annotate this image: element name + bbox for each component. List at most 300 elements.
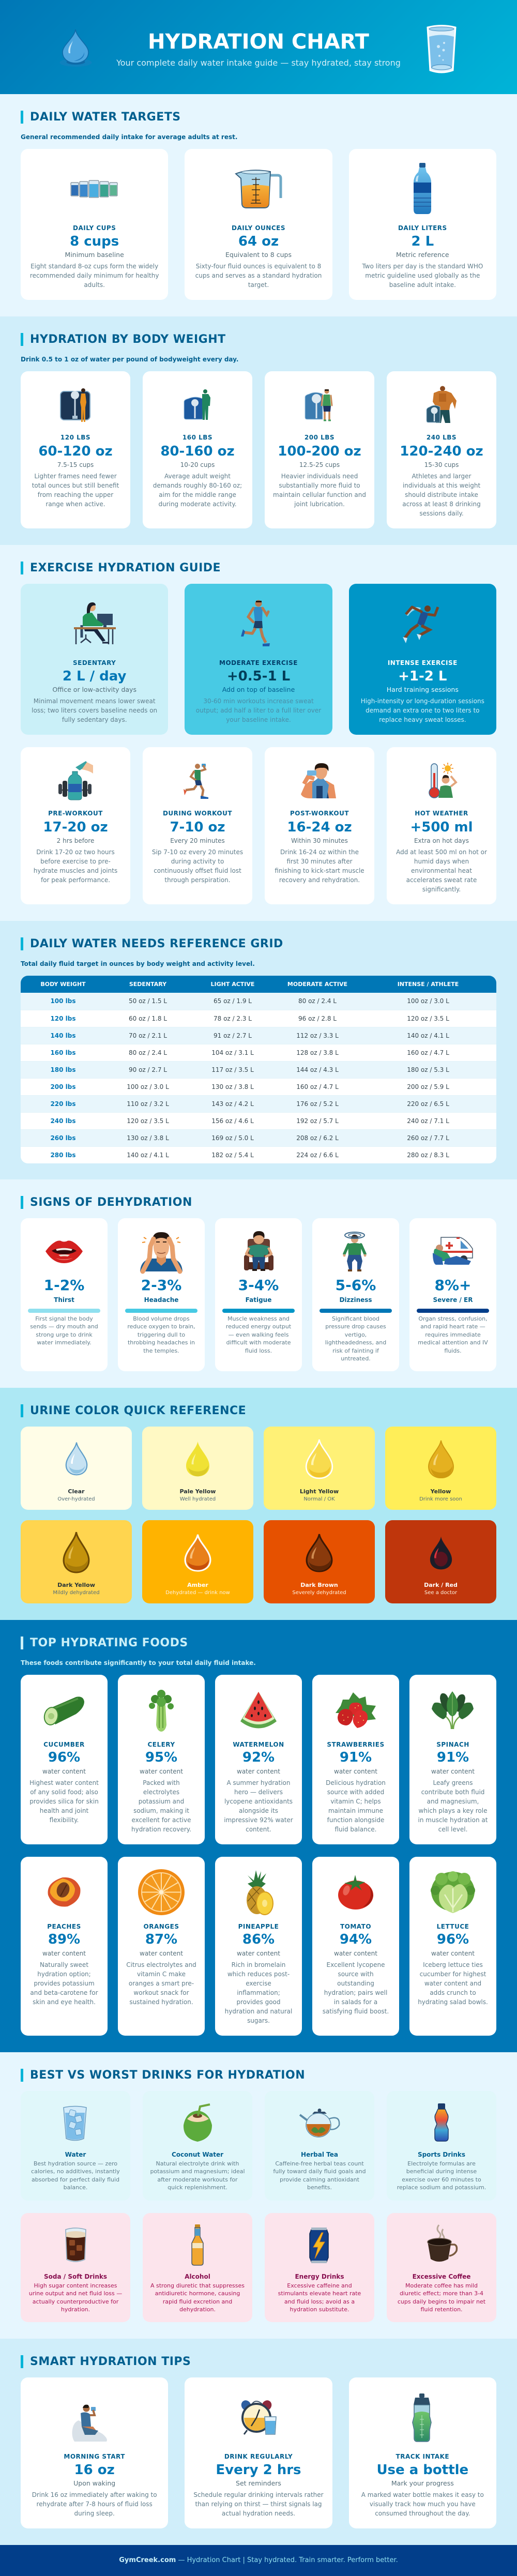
name: Coconut Water [172,2151,223,2158]
icon: beer bottle [191,2224,204,2266]
description: hydrating salad bowls. [418,1998,488,2006]
description: individuals at this weight [403,482,480,489]
card: post-workout [265,747,374,904]
description: joint lubrication. [294,501,345,508]
section: top hydrating foods [0,1620,517,2052]
label: STRAWBERRIES [327,1740,385,1748]
description [30,263,159,289]
description [349,2490,496,2518]
table: fluid targets by weight and activity: MODERATE ACTIVE [287,981,347,988]
description: Rich in bromelain [232,1961,285,1968]
icon: man drinking in bed [71,2405,109,2442]
description: recovery and rehydration. [279,876,360,884]
description: for peak performance. [41,876,110,884]
label: ORANGES [144,1922,179,1930]
table: fluid targets by weight and activity: 110 oz / 3.2 L [127,1100,169,1108]
note: 7.5-15 cups [57,461,94,468]
card: track intake [349,2377,496,2528]
card: 200 lbs [265,371,374,528]
table: fluid targets by weight and activity: 80 oz / 2.4 L [129,1049,167,1056]
description: pressure drop causes [325,1323,386,1330]
value: +500 ml [410,819,473,835]
meaning: Over-hydrated [57,1496,95,1502]
note: water content [237,1768,280,1775]
table: fluid targets by weight and activity: 100 oz / 3.0 L [407,997,449,1005]
heading: SIGNS OF DEHYDRATION [30,1196,192,1209]
note: water content [334,1950,377,1957]
description: contribute both fluid [421,1789,484,1796]
icon: glass teapot [299,2109,340,2138]
value: 2-3% [141,1277,181,1294]
description [409,1960,496,2007]
value: 96% [48,1750,80,1765]
name: Severe / ER [433,1296,473,1304]
description: maintain cellular function and [273,491,366,498]
value: 8 cups [70,234,119,249]
icon: tomato [338,1875,373,1910]
section: hydration by body weight [0,316,517,545]
card: clear [21,1427,132,1510]
name: Pale Yellow [180,1488,216,1495]
title: HYDRATION CHART [148,30,369,54]
description: workout snack for [133,1989,189,1996]
description: than relying on thirst — thirst signals lag [195,2501,322,2508]
section: urine color quick reference [0,1388,517,1620]
table: fluid targets by weight and activity: 143 oz / 4.2 L [211,1100,254,1108]
description: and rapid heart rate — [420,1323,485,1330]
card: soda [21,2213,130,2322]
icon: scale and slim woman [60,388,90,422]
description: before exercise to pre- [40,858,111,865]
label: SEDENTARY [73,659,116,666]
table: fluid targets by weight and activity: 160 oz / 4.7 L [407,1049,449,1056]
name: Fatigue [246,1296,271,1304]
card: daily ounces [185,149,332,300]
section: daily water needs reference grid [0,921,517,1179]
card: 160 lbs [143,371,252,528]
note: Mark your progress [391,2479,454,2487]
name: Water [65,2151,86,2158]
description: fully sedentary days. [62,716,127,723]
heading: DAILY WATER NEEDS REFERENCE GRID [30,937,283,950]
description: during sleep. [74,2510,115,2517]
note: water content [140,1768,183,1775]
table: fluid targets by weight and activity: 100 oz / 3.0 L [127,1083,169,1090]
card: water [21,2091,130,2201]
label: 240 LBS [427,434,457,441]
note: water content [237,1950,280,1957]
description: cups daily begins to impair net [398,2298,485,2305]
table: fluid targets by weight and activity: 70 oz / 2.1 L [129,1032,167,1039]
description [32,473,119,508]
value: 16-24 oz [287,819,352,835]
description: dehydration. [179,2306,216,2313]
icon: peach half [47,1877,81,1907]
label: SPINACH [436,1740,469,1748]
description [153,473,242,508]
icon: woman at desk [74,602,116,644]
card: watermelon [215,1675,302,1844]
description: medical attention and IV [418,1339,488,1346]
name: Dark Brown [300,1582,338,1588]
card: pineapple [215,1857,302,2036]
meaning: Severely dehydrated [292,1590,346,1596]
label: 120 LBS [60,434,90,441]
description: Caffeine-free herbal teas count [275,2160,364,2167]
card: oranges [118,1857,205,2036]
note: Metric reference [396,251,449,259]
section: exercise hydration guide [0,545,517,921]
description: the temples. [143,1347,179,1354]
description: and beta-carotene for [30,1989,98,1996]
table: fluid targets by weight and activity: 78 oz / 2.3 L [214,1014,252,1022]
description: hydration; pairs well [324,1989,387,1996]
description: from reaching the upper [38,491,113,498]
description: Moderate coffee has mild [405,2282,478,2289]
icon: orange slice [138,1869,185,1915]
description [21,1778,108,1825]
value: Every 2 hrs [216,2462,301,2478]
description [418,1315,488,1354]
name: Excessive Coffee [413,2273,470,2280]
table: fluid targets by weight and activity: 120 oz / 3.5 L [127,1117,169,1124]
note: Every 20 minutes [170,837,225,844]
description: Drink 17-20 oz two hours [36,848,115,856]
description: vertigo, [345,1331,367,1338]
description: electrolytes [143,1789,179,1796]
card: fatigue [215,1218,302,1371]
name: Yellow [431,1488,451,1495]
card: lettuce [409,1857,496,2036]
description [226,1315,291,1354]
description: continuously offset fluid lost [154,867,241,874]
description: throbbing headaches in [128,1339,195,1346]
meaning: See a doctor [424,1590,457,1596]
intro text: These foods contribute significantly to your total daily fluid intake. [21,1659,256,1666]
note: Upon waking [73,2479,115,2487]
table: fluid targets by weight and activity: 200 lbs [50,1083,76,1090]
description: excellent for active [131,1816,191,1824]
subtitle: Your complete daily water intake guide — stay hydrated, stay strong [116,58,401,68]
description: Minimal movement means lower sweat [34,698,156,705]
description [312,1960,399,2016]
description: quick replenishment. [168,2184,227,2191]
meaning: Well hydrated [180,1496,216,1502]
icon: five glasses [70,180,118,198]
description: health and joint [40,1807,88,1814]
description: exercise [246,1980,271,1987]
description: which reduces post- [227,1971,290,1978]
value: 87% [145,1932,177,1947]
name: Headache [144,1296,178,1304]
value: 5-6% [336,1277,376,1294]
description: 30-60 min workouts increase sweat [203,698,314,705]
name: Amber [187,1582,208,1588]
label: DAILY LITERS [398,224,447,232]
description: demands roughly 80-160 oz; [153,482,242,489]
name: Alcohol [185,2273,210,2280]
description: provides potassium [34,1980,95,1987]
description: satisfying fluid boost. [323,2008,389,2015]
icon: pineapple [247,1870,273,1915]
description: fluid balance. [335,1826,376,1833]
description: provides silica for skin [29,1798,99,1805]
icon: iced water glass [63,2105,87,2141]
table: fluid targets by weight and activity: 260 lbs [50,1134,76,1142]
icon: runner drinking [184,764,208,799]
card: tomato [312,1857,399,2036]
description: A summer hydration [226,1779,291,1786]
description: in salads for a [334,1998,377,2006]
description [127,1315,195,1354]
description: Best hydration source — zero [34,2160,117,2167]
label: LETTUCE [437,1922,469,1930]
table: fluid targets by weight and activity: 240 lbs [50,1117,76,1124]
card: daily liters [349,149,496,300]
icon: thermometer, sun and man [429,763,458,798]
description: Excellent lycopene [327,1961,385,1968]
name: Herbal Tea [301,2151,338,2158]
description [312,1778,399,1834]
table: fluid targets by weight and activity: 156 oz / 4.6 L [211,1117,254,1124]
card: thirst [21,1218,108,1371]
description: output; add half a liter to a full liter over [196,707,321,714]
label: CELERY [147,1740,175,1748]
value: 3-4% [238,1277,279,1294]
description: actually counterproductive for [33,2298,118,2305]
description: water immediately. [37,1339,92,1346]
note: Extra on hot days [414,837,469,844]
note: Within 30 minutes [291,837,348,844]
footer text: GymCreek.com — Hydration Chart | Stay hydrated. Train smarter. Perform better. [119,2556,398,2564]
table: fluid targets by weight and activity: 208 oz / 6.2 L [296,1134,339,1142]
heading: EXERCISE HYDRATION GUIDE [30,562,221,574]
intro text: General recommended daily intake for average adults at rest. [21,133,237,141]
value: 96% [437,1932,469,1947]
note: Office or low-activity days [52,686,136,693]
description [396,848,487,893]
table: fluid targets by weight and activity: 96 oz / 2.8 L [298,1014,337,1022]
icon: pale yellow drop [185,1441,210,1477]
description: lightheadedness, and [325,1339,386,1346]
description: Sip 7-10 oz every 20 minutes [152,848,243,856]
label: CUCUMBER [43,1740,85,1748]
icon: light yellow drop [305,1438,333,1479]
description: outstanding [337,1980,374,1987]
description: impressive 92% water [224,1816,293,1824]
description: Iceberg lettuce ties [423,1961,483,1968]
table: fluid targets by weight and activity: 120 oz / 3.5 L [407,1014,449,1022]
description: accelerates sweat rate [406,876,477,884]
table: fluid targets by weight and activity: 140 oz / 4.1 L [407,1032,449,1039]
description: which plays a key role [419,1807,487,1814]
description: of any solid food; also [30,1789,98,1796]
table: fluid targets by weight and activity: BODY WEIGHT [40,981,86,988]
icon: energy drink can [309,2226,329,2264]
table: fluid targets by weight and activity: 180 oz / 5.3 L [407,1066,449,1073]
table: fluid targets by weight and activity [21,976,496,1163]
table: fluid targets by weight and activity: 104 oz / 3.1 L [211,1049,254,1056]
icon: sprinting man [403,605,439,643]
card: dizziness [312,1218,399,1371]
card: sedentary [21,584,168,735]
description: source with [338,1971,374,1978]
description: first 30 minutes after [286,858,353,865]
heading: DAILY WATER TARGETS [30,111,181,124]
table: fluid targets by weight and activity: 220 lbs [50,1100,76,1108]
description: function alongside [327,1816,384,1824]
description: Average adult weight [164,473,231,480]
value: 86% [242,1932,275,1947]
table: fluid targets by weight and activity: 91 oz / 2.7 L [214,1032,252,1039]
value: 17-20 oz [43,819,108,835]
note: Equivalent to 8 cups [225,251,292,259]
description: strong urge to drink [36,1331,93,1338]
card: daily cups [21,149,168,300]
description: potassium and [139,1798,184,1805]
name: Thirst [54,1296,74,1304]
value: 8%+ [434,1277,472,1294]
table: fluid targets by weight and activity: 130 oz / 3.8 L [127,1134,169,1142]
icon: yellow drop [428,1439,454,1479]
value: 91% [437,1750,469,1765]
table: fluid targets by weight and activity: LIGHT ACTIVE [211,981,254,988]
table: fluid targets by weight and activity: 100 lbs [50,997,76,1005]
icon: dry lips [45,1240,83,1263]
value: 16 oz [74,2462,115,2478]
description: Packed with [143,1779,180,1786]
value: 1-2% [44,1277,84,1294]
description: Athletes and larger [412,473,471,480]
description [265,2160,374,2192]
icon: alarm clock and glass [240,2398,277,2435]
description: Natural electrolyte drink with [156,2160,239,2167]
description: lycopene antioxidants [224,1798,293,1805]
icon: glass of water [427,25,457,73]
table: fluid targets by weight and activity: 224 oz / 6.6 L [296,1151,339,1158]
description [273,473,366,508]
card: pre-workout [21,747,130,904]
meaning: Dehydrated — drink now [165,1590,230,1596]
table: fluid targets by weight and activity: 260 oz / 7.7 L [407,1134,449,1142]
card: 120 lbs [21,371,130,528]
table: fluid targets by weight and activity: 280 lbs [50,1151,76,1158]
icon: lettuce [431,1872,475,1913]
value: 80-160 oz [160,444,235,459]
name: Clear [68,1488,85,1495]
label: TOMATO [340,1922,371,1930]
description: sugars. [247,2017,270,2024]
description [143,2160,252,2192]
description: Heavier individuals need [281,473,358,480]
description: risk of fainting if [332,1347,379,1354]
description [196,698,322,723]
description: aim for the middle range [159,491,236,498]
description: through perspiration. [164,876,231,884]
description: benefits. [307,2184,332,2191]
description: your baseline intake. [226,716,291,723]
icon: marked water bottle [413,2393,432,2442]
description: fluids. [444,1347,462,1354]
description: water content and [424,1980,481,1987]
description [21,2160,130,2192]
description: environmental heat [411,867,472,874]
note: Hard training sessions [387,686,459,693]
description: hero — delivers [234,1789,283,1796]
description: requires immediate [425,1331,481,1338]
value: 89% [48,1932,80,1947]
card: morning start [21,2377,168,2528]
card: light yellow [264,1427,375,1510]
description: Delicious hydration [326,1779,386,1786]
value: +1-2 L [398,669,447,684]
table: fluid targets by weight and activity: 140 oz / 4.1 L [127,1151,169,1158]
label: INTENSE EXERCISE [388,659,458,666]
description: metric guideline used globally as the [365,272,480,279]
description: skin and eye health. [33,1998,96,2006]
card: dark red [385,1520,496,1603]
value: 100-200 oz [278,444,361,459]
card: moderate exercise [185,584,332,735]
description: Muscle weakness and [227,1315,290,1322]
icon: measuring jug [235,170,282,208]
label: PEACHES [47,1922,81,1930]
description: actual hydration needs. [222,2510,295,2517]
description: sends — dry mouth and [30,1323,98,1330]
icon: spinach [432,1691,474,1729]
card: sports drinks [387,2091,496,2201]
description: sessions daily. [419,510,464,517]
card: intense exercise [349,584,496,735]
icon: scale and muscular man [426,386,457,423]
table: fluid targets by weight and activity: 128 oz / 3.8 L [296,1049,339,1056]
card: amber [142,1520,253,1603]
label: TRACK INTAKE [396,2453,449,2460]
label: HOT WEATHER [415,810,468,817]
label: POST-WORKOUT [290,810,349,817]
description [30,1315,98,1346]
label: PRE-WORKOUT [48,810,103,817]
card: strawberries [312,1675,399,1844]
description: source with added [327,1789,384,1796]
name: Light Yellow [300,1488,339,1495]
value: 60-120 oz [38,444,113,459]
description [118,1960,205,2007]
card: energy drinks [265,2213,374,2322]
table: fluid targets by weight and activity: 65 oz / 1.9 L [214,997,252,1005]
description: urine output and net fluid loss — [29,2290,122,2297]
description: significantly. [422,886,461,893]
table: fluid targets by weight and activity: 192 oz / 5.7 L [296,1117,339,1124]
value: 7-10 oz [170,819,225,835]
icon: amber drop [184,1534,211,1572]
table: fluid targets by weight and activity: 50 oz / 1.5 L [129,997,167,1005]
description: Blood volume drops [133,1315,190,1322]
section: signs of dehydration [0,1179,517,1388]
description: reduce oxygen to brain, [127,1323,195,1330]
icon: celery [147,1689,175,1732]
description: Add at least 500 ml on hot or [396,848,487,856]
note: 2 hrs before [57,837,94,844]
description [21,2490,168,2518]
description: diuretic effect; more than 3-4 [400,2290,483,2297]
description [118,1778,205,1834]
note: water content [431,1950,475,1957]
description: provides good [236,1998,281,2006]
description [275,848,364,884]
card: celery [118,1675,205,1844]
description: across at least 8 drinking [402,501,481,508]
